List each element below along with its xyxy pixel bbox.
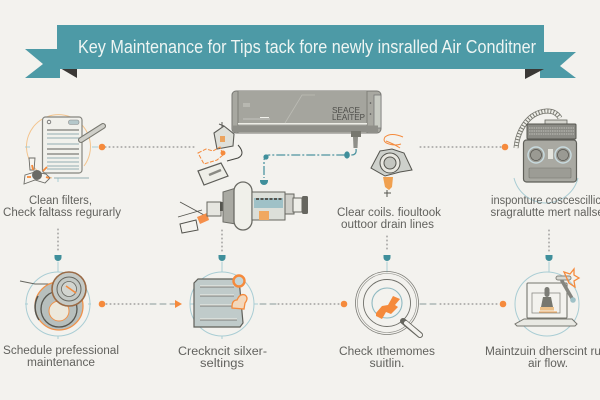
icon: filter document	[24, 115, 103, 184]
icon: air conditioner unit	[232, 91, 381, 148]
title banner	[25, 25, 576, 79]
label: maintain airflow: air flow.	[528, 358, 568, 370]
icon: laptop with brush	[515, 269, 579, 336]
label: check thermostat: Check ıthemomes	[339, 346, 435, 358]
icon: radio-like control panel	[514, 111, 578, 203]
icon: outdoor coil probe	[371, 134, 412, 197]
label: check settings: seltings	[200, 358, 244, 370]
dashed refrigerant line	[260, 149, 356, 185]
icon: schedule gauge coil	[20, 272, 91, 339]
label: check settings: Creckncit silxer-	[178, 346, 267, 358]
label: clear coils: Clear coils. fioultook	[337, 207, 441, 219]
icon: air conditioner unit: LEAITEP	[332, 112, 365, 122]
label: maintain airflow: Maintzuin dherscint ru	[485, 346, 600, 358]
icon: settings vent panel	[190, 272, 258, 339]
icon: small controls and thermostat	[198, 122, 242, 185]
connector lines	[58, 147, 549, 304]
icon: compressor assembly	[178, 182, 308, 233]
label: schedule maintenance: maintenance	[27, 357, 95, 369]
label: schedule maintenance: Schedule prefessional	[3, 345, 119, 357]
label: clean filters: Check faltass regurarly	[3, 207, 121, 219]
icon: thermostat magnifier	[356, 272, 420, 335]
icon: air conditioner unit: SEACE	[332, 105, 360, 115]
label: clean filters: Clean filters,	[29, 195, 92, 207]
title text: Key Maintenance for Tips tack fore newly insralled Air Conditner	[78, 37, 536, 57]
connector nodes	[54, 144, 552, 308]
label: check thermostat: suitlin.	[370, 358, 404, 370]
label: clear coils: outtoor drain lines	[341, 219, 434, 231]
